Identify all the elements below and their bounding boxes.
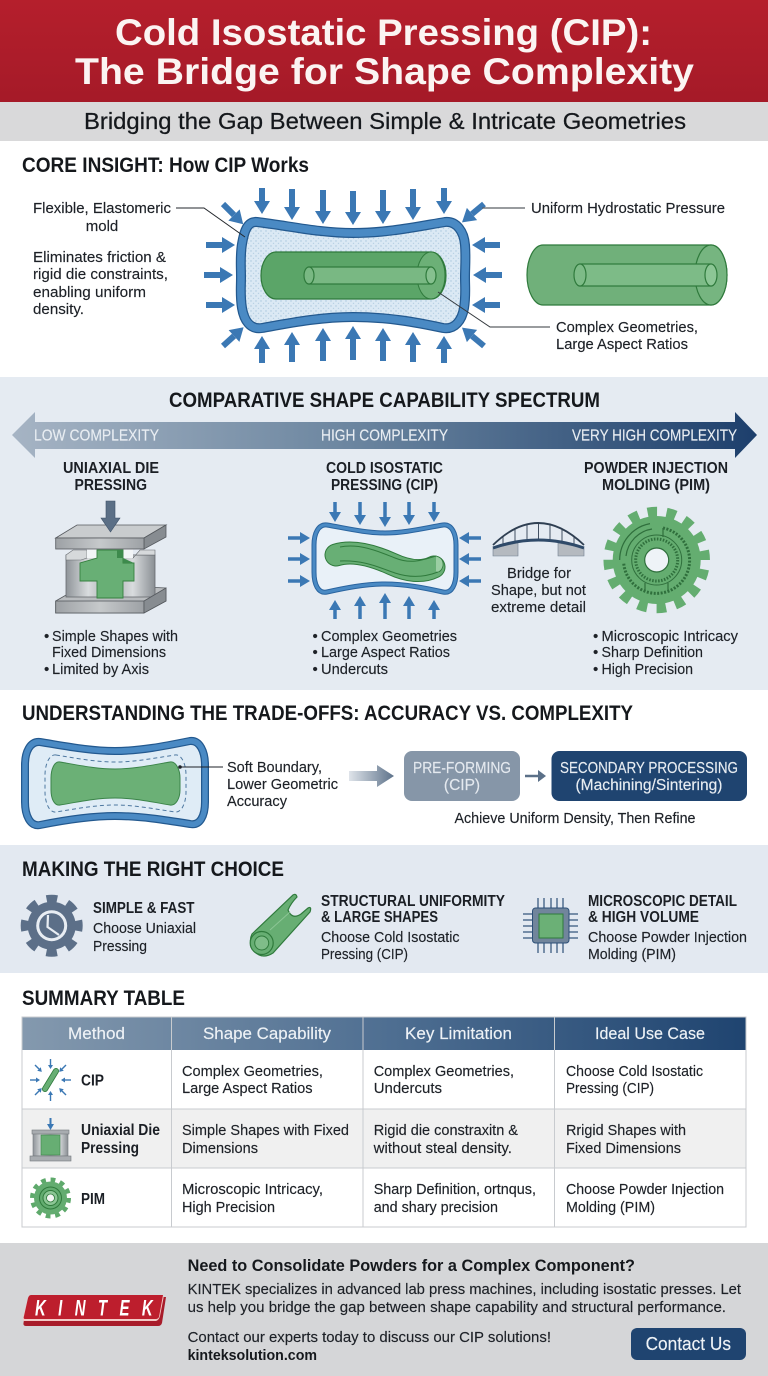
- text: cip bullets: [312, 628, 457, 678]
- text: structural uniformity: [321, 893, 506, 963]
- box: pre-forming: [404, 751, 520, 801]
- label: complex geometries: Large Aspect Ratios: [556, 336, 688, 353]
- column heading: uniaxial: UNIAXIAL DIE: [63, 460, 159, 477]
- icon: pim gear: [600, 504, 713, 616]
- leader: pressure: [482, 207, 525, 209]
- text: soft boundary: Lower Geometric: [227, 776, 338, 793]
- subtitle band: [0, 102, 768, 141]
- table row: PIM: PIM: [81, 1191, 105, 1208]
- label: uniform hydrostatic pressure: Uniform Hydrostatic Pressure: [531, 200, 725, 217]
- text: uniaxial bullets: Limited by Axis: [52, 661, 149, 678]
- table row: CIP: Choose Cold Isostatic: [566, 1063, 703, 1080]
- icon: gear clock: [20, 894, 83, 957]
- table row: PIM: and shary precision: [374, 1199, 498, 1216]
- label: flexible mold: [33, 200, 171, 235]
- icon: soft boundary mold: [25, 741, 205, 825]
- table header row: Key Limitation: [405, 1024, 512, 1043]
- spectrum label very high: VERY HIGH COMPLEXITY: [572, 428, 737, 444]
- heading: core insight: CORE INSIGHT: How CIP Works: [22, 154, 309, 177]
- table row: uniaxial die pressing: without steal density.: [373, 1140, 512, 1157]
- panel: comparative shape capability spectrum: [0, 377, 768, 690]
- text: uniaxial bullets: Fixed Dimensions: [52, 644, 166, 661]
- text: uniaxial bullets: Simple Shapes with: [52, 628, 178, 645]
- table header row: Shape Capability: [203, 1024, 331, 1043]
- table row: CIP: Complex Geometries,: [374, 1063, 514, 1080]
- text: pim bullets: •: [593, 661, 598, 678]
- panel: trade-offs: [0, 690, 768, 845]
- table row: uniaxial die pressing: [30, 1118, 686, 1161]
- text: eliminates friction: enabling uniform: [33, 284, 146, 301]
- text: simple and fast: Pressing: [93, 938, 147, 955]
- text: cip bullets: Large Aspect Ratios: [321, 644, 450, 661]
- text: eliminates friction: [33, 249, 168, 318]
- table row: uniaxial die pressing: Rrigid Shapes with: [566, 1122, 686, 1139]
- text: structural uniformity: & LARGE SHAPES: [321, 909, 438, 926]
- table header row: Method: [68, 1024, 125, 1043]
- icon: green tube: [250, 894, 311, 956]
- text: uniaxial bullets: •: [44, 661, 49, 678]
- label: flexible mold: mold: [86, 218, 118, 235]
- subtitle band: Bridging the Gap Between Simple & Intricate Geometries: [84, 108, 686, 134]
- text: structural uniformity: STRUCTURAL UNIFORMITY: [321, 893, 506, 910]
- text: contact line: [188, 1329, 551, 1364]
- box: secondary processing: (Machining/Sintering): [576, 777, 722, 794]
- icon: cip small: [30, 1059, 71, 1101]
- column heading: pim: [584, 460, 728, 494]
- table row: CIP: Large Aspect Ratios: [182, 1080, 312, 1097]
- icon: die small: [30, 1118, 71, 1161]
- text: soft boundary: Accuracy: [227, 793, 287, 810]
- text: kintek description: KINTEK specializes in advanced lab press machines, including isostatic presses. Let: [188, 1281, 742, 1298]
- button: contact us: [631, 1328, 746, 1360]
- panel: call to action: [0, 1243, 768, 1376]
- button: contact us: Contact Us: [646, 1334, 731, 1354]
- box: secondary processing: SECONDARY PROCESSING: [560, 760, 738, 777]
- text: cip bullets: •: [312, 628, 318, 645]
- table row: uniaxial die pressing: Simple Shapes with Fixed: [182, 1122, 349, 1139]
- column heading: cip: PRESSING (CIP): [331, 477, 438, 494]
- leader: geometries: [438, 292, 550, 327]
- table row: uniaxial die pressing: Pressing: [81, 1140, 139, 1157]
- text: uniaxial bullets: •: [44, 628, 49, 645]
- text: microscopic detail: Molding (PIM): [588, 946, 676, 963]
- icon: gear small: [32, 1180, 68, 1216]
- text: microscopic detail: Choose Powder Injection: [588, 929, 747, 946]
- text: pim bullets: •: [593, 628, 598, 645]
- icon: uniaxial die press: [56, 501, 166, 613]
- text: cip bullets: Undercuts: [321, 661, 388, 678]
- logo: kintek: [23, 1295, 166, 1326]
- label: flexible mold: Flexible, Elastomeric: [33, 200, 171, 217]
- column heading: uniaxial: PRESSING: [74, 477, 147, 494]
- table row: CIP: Complex Geometries,: [182, 1063, 323, 1080]
- text: pim bullets: Sharp Definition: [602, 644, 703, 661]
- table row: uniaxial die pressing: Dimensions: [182, 1140, 258, 1157]
- column heading: pim: POWDER INJECTION: [584, 460, 728, 477]
- heading: summary table: SUMMARY TABLE: [22, 987, 185, 1010]
- arrow: to pre-forming: [349, 765, 394, 787]
- table row: CIP: Pressing (CIP): [566, 1080, 654, 1097]
- text: pim bullets: [593, 628, 738, 678]
- heading: right choice: MAKING THE RIGHT CHOICE: [22, 858, 284, 881]
- icon: elastomeric mold with part: [241, 222, 465, 328]
- table row: uniaxial die pressing: Fixed Dimensions: [566, 1140, 681, 1157]
- box: pre-forming: PRE-FORMING: [413, 760, 511, 777]
- logo: kintek: KINTEK: [35, 1296, 154, 1320]
- text: structural uniformity: Pressing (CIP): [321, 946, 408, 963]
- panel: core insight: [0, 141, 768, 377]
- table row: CIP: [30, 1059, 703, 1101]
- box: secondary processing: [552, 751, 747, 801]
- label: complex geometries: Complex Geometries,: [556, 319, 698, 336]
- text: bridge note: [491, 565, 587, 616]
- leader: soft boundary: [178, 765, 223, 769]
- text: bridge note: Bridge for: [507, 565, 571, 582]
- icon: cip mold with curved part: [288, 502, 481, 619]
- column heading: cip: COLD ISOSTATIC: [326, 460, 443, 477]
- arrow: to secondary processing: [525, 775, 538, 777]
- heading: trade-offs: UNDERSTANDING THE TRADE-OFFS: ACCURACY VS. COMPLEXITY: [22, 702, 633, 725]
- table row: PIM: [32, 1180, 724, 1216]
- text: eliminates friction: Eliminates friction &: [33, 249, 166, 266]
- text: pim bullets: High Precision: [602, 661, 693, 678]
- table row: uniaxial die pressing: Uniaxial Die: [81, 1122, 160, 1139]
- text: simple and fast: SIMPLE & FAST: [93, 900, 195, 917]
- title line 1: Cold Isostatic Pressing (CIP):: [115, 12, 652, 53]
- table row: CIP: Undercuts: [374, 1080, 442, 1097]
- table header row: Ideal Use Case: [595, 1024, 705, 1043]
- text: contact line: kinteksolution.com: [188, 1347, 317, 1364]
- text: simple and fast: Choose Uniaxial: [93, 920, 196, 937]
- table row: PIM: High Precision: [182, 1199, 275, 1216]
- label: complex geometries: [556, 319, 698, 353]
- icon: pressure arrows: [204, 188, 502, 363]
- text: kintek description: [188, 1281, 742, 1316]
- panel: summary table: [22, 987, 746, 1227]
- text: soft boundary: [227, 759, 338, 810]
- box: pre-forming: (CIP): [444, 777, 480, 794]
- panel: making the right choice: [0, 845, 768, 973]
- icon: microchip: [523, 898, 578, 953]
- icon: bridge: [493, 523, 584, 556]
- table row: PIM: Microscopic Intricacy,: [182, 1181, 323, 1198]
- text: uniaxial bullets: [44, 628, 178, 678]
- double arrow spectrum: [12, 412, 757, 458]
- text: achieve uniform density: Achieve Uniform Density, Then Refine: [454, 810, 696, 827]
- text: pim bullets: Microscopic Intricacy: [602, 628, 738, 645]
- text: soft boundary: Soft Boundary,: [227, 759, 322, 776]
- text: microscopic detail: [588, 893, 747, 963]
- text: bridge note: extreme detail: [491, 599, 586, 616]
- table header row: [22, 1017, 746, 1050]
- text: pim bullets: •: [593, 644, 598, 661]
- text: kintek description: us help you bridge the gap between shape capability and structural performance.: [188, 1299, 726, 1316]
- text: cip bullets: Complex Geometries: [321, 628, 457, 645]
- text: eliminates friction: rigid die constraints,: [33, 266, 168, 283]
- text: contact line: Contact our experts today to discuss our CIP solutions!: [188, 1329, 551, 1346]
- table row: PIM: Sharp Definition, ortnqus,: [374, 1181, 536, 1198]
- column heading: uniaxial: [63, 460, 159, 494]
- table row: CIP: CIP: [81, 1072, 104, 1090]
- table row: uniaxial die pressing: Rigid die constraxitn &: [374, 1122, 518, 1139]
- heading: spectrum: COMPARATIVE SHAPE CAPABILITY SPECTRUM: [169, 389, 600, 412]
- table row: PIM: Molding (PIM): [566, 1199, 655, 1216]
- title line 2: The Bridge for Shape Complexity: [75, 51, 694, 92]
- text: microscopic detail: & HIGH VOLUME: [588, 909, 699, 926]
- table row: PIM: Choose Powder Injection: [566, 1181, 724, 1198]
- text: eliminates friction: density.: [33, 301, 84, 318]
- text: cip bullets: •: [312, 661, 318, 678]
- text: simple and fast: [93, 900, 196, 955]
- text: microscopic detail: MICROSCOPIC DETAIL: [588, 893, 737, 910]
- column heading: pim: MOLDING (PIM): [602, 477, 710, 494]
- column heading: cip: [326, 460, 443, 494]
- spectrum label low: LOW COMPLEXITY: [34, 428, 159, 444]
- heading: call to action: Need to Consolidate Powders for a Complex Component?: [188, 1257, 635, 1275]
- spectrum label high: HIGH COMPLEXITY: [321, 428, 448, 444]
- title banner: [0, 0, 768, 102]
- text: cip bullets: •: [312, 644, 318, 661]
- text: bridge note: Shape, but not: [491, 582, 587, 599]
- text: structural uniformity: Choose Cold Isostatic: [321, 929, 460, 946]
- icon: finished cylinder: [527, 245, 727, 305]
- leader: mold: [176, 208, 245, 237]
